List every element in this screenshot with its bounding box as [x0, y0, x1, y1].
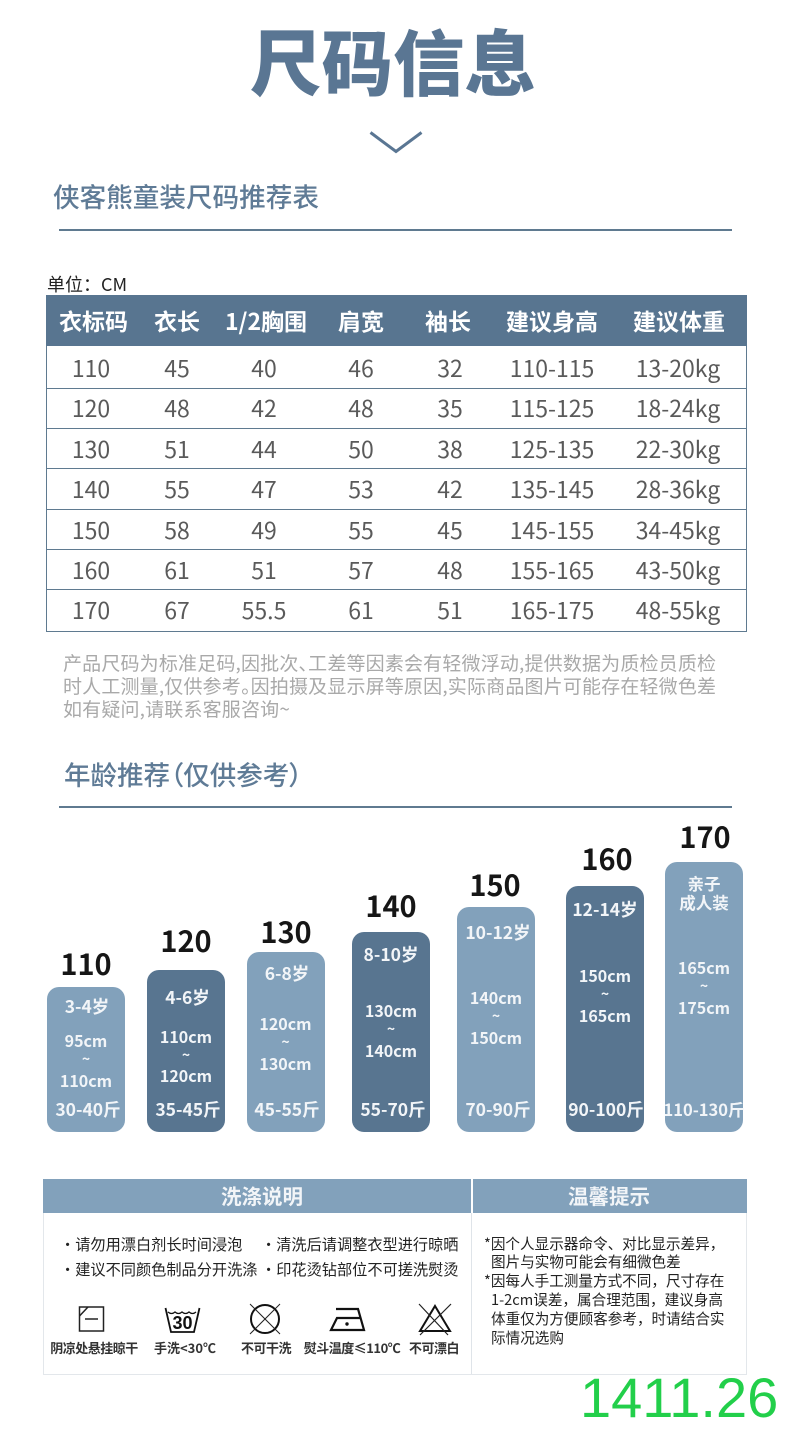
tips text: [484, 1233, 725, 1348]
row 110: 110: [72, 350, 110, 384]
bar: size 120: 35-45斤: [155, 1097, 221, 1122]
tips text: 图片与实物可能会有细微色差: [491, 1251, 681, 1272]
header: tips: [473, 1179, 747, 1213]
size label 130: 130: [260, 910, 312, 952]
row 110: 45: [164, 350, 190, 384]
header: washing: 洗涤说明: [221, 1180, 303, 1210]
bar: size 160: ~: [601, 984, 609, 1004]
bar: size 120: 4-6岁: [165, 985, 210, 1010]
bar: size 140: 140cm: [365, 1038, 417, 1062]
row 150: 34-45kg: [636, 512, 720, 546]
row 140: 140: [72, 471, 110, 505]
table header: 建议身高: [506, 303, 598, 337]
bar: size 110: [47, 987, 125, 1132]
label: hand wash: 手洗<30℃: [154, 1338, 216, 1357]
size disclaimer note: [63, 649, 716, 722]
row 120: [72, 390, 720, 424]
row 130: [72, 431, 720, 465]
bar: size 170: 亲子: [688, 871, 720, 895]
watermark number: 1411.26: [580, 1366, 778, 1429]
tips text: 体重仅为方便顾客参考，时请结合实: [491, 1308, 725, 1329]
bar: size 140: ~: [387, 1019, 395, 1039]
heading: age recommendation: 年龄推荐（仅供参考）: [64, 754, 302, 793]
row 110: 110-115: [510, 350, 594, 384]
row 120: 120: [72, 390, 110, 424]
row 170: [72, 592, 720, 626]
header: washing: [43, 1179, 471, 1213]
row 110: 46: [348, 350, 374, 384]
icon: hand wash 30: 30: [172, 1313, 193, 1333]
size label 120: 120: [160, 919, 212, 961]
size disclaimer note: 产品尺码为标准足码,因批次、工差等因素会有轻微浮动,提供数据为质检员质检: [63, 649, 716, 676]
row 140: 42: [437, 471, 463, 505]
heading: size table: 侠客熊童装尺码推荐表: [53, 176, 319, 215]
bar: size 170: 165cm: [678, 955, 730, 979]
row 150: 49: [251, 512, 277, 546]
row 150: 55: [348, 512, 374, 546]
row 160: [72, 552, 720, 586]
washing instructions text: ・建议不同颜色制品分开洗涤: [60, 1258, 257, 1280]
row 140: 28-36kg: [636, 471, 720, 505]
row 130: 51: [164, 431, 190, 465]
row 150: 58: [164, 512, 190, 546]
row 120: 35: [437, 390, 463, 424]
size label 170: 170: [679, 815, 731, 857]
row 120: 48: [164, 390, 190, 424]
bar: size 110: 3-4岁: [65, 994, 109, 1019]
bar: size 120: [147, 970, 225, 1132]
bar: size 140: [352, 932, 430, 1132]
icon: hand wash 30: [164, 1308, 200, 1333]
bar: size 110: 30-40斤: [55, 1097, 121, 1122]
bar: size 130: [246, 952, 324, 1132]
icon: chevron down: [370, 131, 422, 154]
bar: size 170: 成人装: [679, 890, 729, 914]
bar: size 130: ~: [281, 1032, 290, 1052]
table header: 肩宽: [338, 303, 384, 337]
row 140: 55: [164, 471, 190, 505]
row 130: 38: [437, 431, 463, 465]
icon: shade hang dry: [78, 1306, 104, 1332]
row 150: [72, 512, 720, 546]
table header: 袖长: [425, 303, 471, 337]
icon: no bleach: [418, 1304, 452, 1336]
bar: size 160: [566, 886, 644, 1132]
row 130: 50: [348, 431, 374, 465]
table header: [46, 295, 747, 346]
bar: size 170: [665, 862, 743, 1132]
row 170: 51: [437, 592, 463, 626]
bar: size 150: ~: [492, 1006, 500, 1026]
label: shade hang dry: 阴凉处悬挂晾干: [50, 1338, 138, 1357]
row 160: 48: [437, 552, 463, 586]
label: no dry clean: 不可干洗: [241, 1338, 291, 1357]
table header: 建议体重: [633, 303, 725, 337]
panel: care instructions: [43, 1179, 747, 1375]
bar: size 150: 10-12岁: [465, 920, 531, 945]
bar: size 110: 110cm: [60, 1068, 112, 1092]
row 170: 55.5: [242, 592, 286, 626]
row 130: 130: [72, 431, 110, 465]
row 160: 51: [251, 552, 277, 586]
bar: size 150: 140cm: [470, 985, 522, 1009]
bar: size 160: 165cm: [579, 1003, 631, 1027]
row 160: 43-50kg: [636, 552, 720, 586]
icon: iron: [329, 1308, 366, 1332]
label: no bleach: 不可漂白: [409, 1338, 459, 1357]
bar: size 160: 150cm: [579, 963, 631, 987]
row 150: 150: [72, 512, 110, 546]
label: iron temperature: 熨斗温度≤110℃: [304, 1338, 400, 1357]
row 170: 67: [164, 592, 190, 626]
row 120: 42: [251, 390, 277, 424]
row 140: 53: [348, 471, 374, 505]
bar: size 170: ~: [700, 976, 708, 996]
washing instructions text: [60, 1233, 458, 1280]
bar: size 130: 130cm: [259, 1051, 312, 1075]
tips text: *因个人显示器命令、对比显示差异，: [484, 1233, 724, 1254]
bar: size 130: 6-8岁: [265, 961, 309, 986]
bar: size 140: 8-10岁: [364, 942, 418, 967]
tips text: 际情况选购: [491, 1327, 564, 1348]
size label 160: 160: [581, 837, 633, 879]
row 150: 145-155: [510, 512, 594, 546]
panel: size table: [46, 295, 747, 632]
icon: no dry clean: [250, 1304, 280, 1334]
row 110: 40: [251, 350, 277, 384]
table header: 衣长: [154, 303, 200, 337]
bar: size 150: 70-90斤: [465, 1097, 531, 1122]
bar: size 170: 175cm: [678, 995, 730, 1019]
bar: size 150: [457, 907, 535, 1132]
unit label: 单位：CM: [47, 271, 127, 297]
bar: size 110: ~: [82, 1049, 90, 1069]
tips text: 1-2cm误差，属合理范围，建议身高: [491, 1289, 723, 1310]
bar: size 160: 90-100斤: [568, 1097, 644, 1122]
row 170: 61: [348, 592, 374, 626]
size label 150: 150: [469, 863, 521, 905]
row 160: 155-165: [510, 552, 594, 586]
bar: size 170: 110-130斤: [663, 1097, 745, 1121]
washing instructions text: ・清洗后请调整衣型进行晾晒: [261, 1233, 458, 1255]
header: tips: 温馨提示: [568, 1180, 650, 1210]
bar: size 150: 150cm: [470, 1025, 522, 1049]
bar: size 120: 120cm: [160, 1063, 212, 1087]
tips text: *因每人手工测量方式不同，尺寸存在: [484, 1270, 724, 1291]
bar: size 130: 45-55斤: [254, 1097, 320, 1122]
size label 110: 110: [60, 942, 112, 984]
size disclaimer note: 如有疑问,请联系客服咨询~: [63, 695, 290, 722]
bar: size 140: 130cm: [365, 998, 417, 1022]
row 110: 32: [437, 350, 463, 384]
table header: 1/2胸围: [225, 303, 307, 337]
bar: size 120: ~: [182, 1045, 190, 1065]
bar: size 120: 110cm: [160, 1024, 212, 1048]
table header: 衣标码: [59, 303, 128, 337]
washing instructions text: ・印花烫钻部位不可搓洗熨烫: [261, 1258, 458, 1280]
row 160: 61: [164, 552, 190, 586]
bar: size 110: 95cm: [65, 1028, 107, 1052]
row 170: 165-175: [510, 592, 594, 626]
size disclaimer note: 时人工测量,仅供参考。因拍摄及显示屏等原因,实际商品图片可能存在轻微色差: [63, 672, 716, 699]
row 140: [72, 471, 720, 505]
row 160: 160: [72, 552, 110, 586]
row 140: 135-145: [510, 471, 594, 505]
row 130: 125-135: [510, 431, 594, 465]
row 130: 44: [251, 431, 277, 465]
row 170: 170: [72, 592, 110, 626]
row 110: [72, 350, 720, 384]
row 110: 13-20kg: [636, 350, 720, 384]
row 120: 48: [348, 390, 374, 424]
row 130: 22-30kg: [636, 431, 720, 465]
row 120: 115-125: [510, 390, 594, 424]
bar: size 160: 12-14岁: [572, 897, 638, 922]
row 170: 48-55kg: [636, 592, 720, 626]
row 160: 57: [348, 552, 374, 586]
bar: size 130: 120cm: [259, 1011, 312, 1035]
title: 尺码信息: [250, 7, 536, 111]
row 140: 47: [251, 471, 277, 505]
bar: size 140: 55-70斤: [360, 1097, 426, 1122]
row 120: 18-24kg: [636, 390, 720, 424]
size label 140: 140: [365, 884, 417, 926]
row 150: 45: [437, 512, 463, 546]
washing instructions text: ・请勿用漂白剂长时间浸泡: [60, 1233, 242, 1255]
